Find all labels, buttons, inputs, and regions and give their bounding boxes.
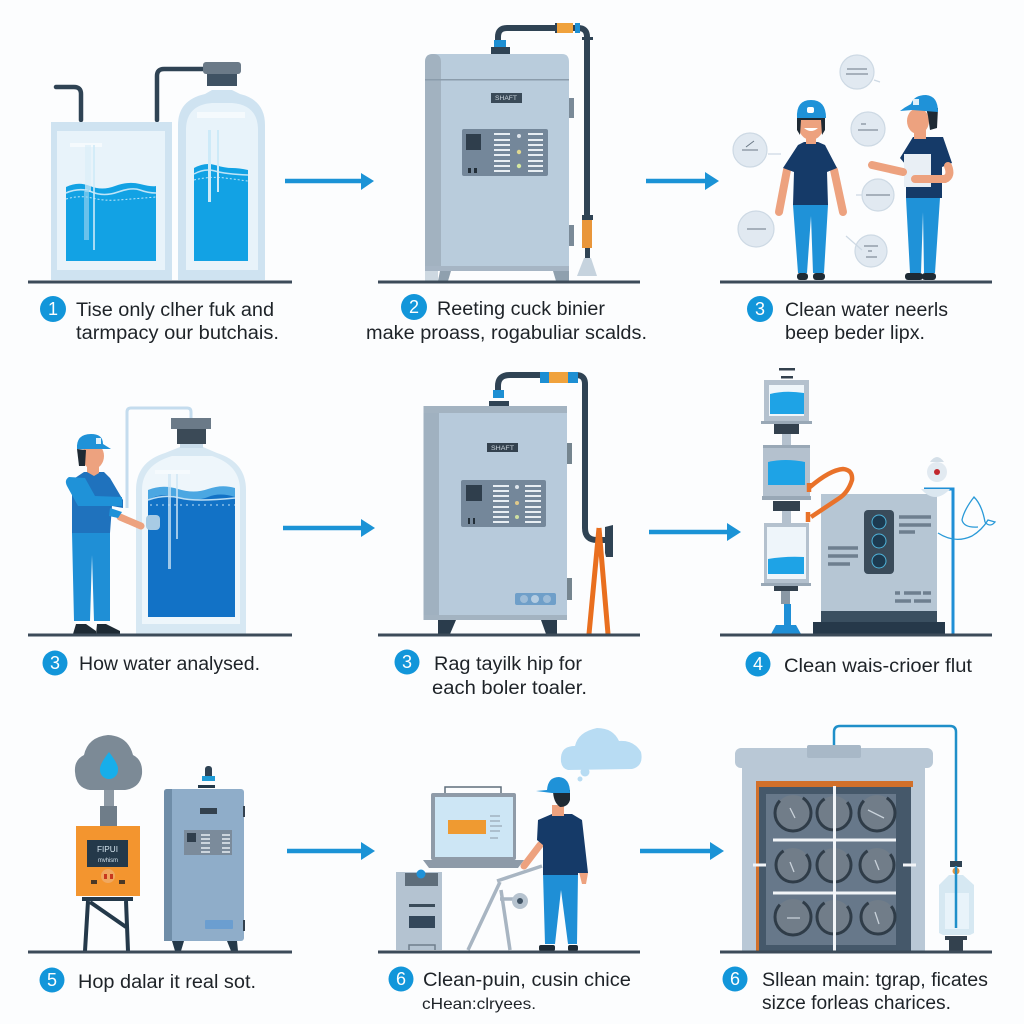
icon: thought cloud bbox=[561, 728, 642, 782]
icon: bottle cap bbox=[203, 62, 241, 86]
icon: left pipe bbox=[56, 87, 81, 120]
icon: blue pipe and gauge bbox=[921, 457, 995, 634]
icon: fan grid bbox=[775, 795, 895, 935]
caption: step 9: sizce forleas charices. bbox=[762, 993, 951, 1014]
caption: step 8: 6 bbox=[396, 969, 406, 989]
icon: square water tank bbox=[51, 122, 172, 280]
icon: white dividers bbox=[753, 786, 916, 951]
icon: orange legs bbox=[589, 528, 608, 634]
caption: step 1 bbox=[40, 296, 279, 344]
icon: boiler cabinet bbox=[425, 54, 574, 281]
icon: stand with wheel bbox=[468, 866, 542, 950]
caption: step 5: 3 bbox=[402, 652, 412, 672]
icon: right pipe bbox=[157, 69, 204, 120]
icon: orange control box: mvhism bbox=[98, 858, 118, 864]
caption: step 2 bbox=[366, 294, 647, 344]
caption: step 6: Clean wais-crioer flut bbox=[784, 656, 973, 677]
caption: step 5: Rag tayilk hip for bbox=[434, 654, 583, 675]
caption: step 6 bbox=[746, 652, 973, 677]
panel: step 5 boiler with orange stand bbox=[378, 372, 741, 699]
arrow bbox=[649, 523, 741, 541]
icon: filter bottle bbox=[939, 861, 974, 951]
panel: step 1 tanks bbox=[28, 62, 374, 344]
icon: feed pipe bbox=[834, 726, 956, 861]
icon: pipe run bbox=[489, 372, 613, 557]
icon: cabinet shell bbox=[735, 745, 933, 951]
arrow bbox=[287, 842, 375, 860]
caption: step 2: 2 bbox=[409, 297, 419, 317]
caption: step 9: Sllean main: tgrap, ficates bbox=[762, 970, 988, 991]
arrow bbox=[640, 842, 724, 860]
icon: printer cabinet bbox=[396, 870, 442, 950]
icon: blue cabinet bbox=[164, 766, 245, 951]
icon: control panel bbox=[461, 480, 546, 527]
caption: step 3: Clean water neerls bbox=[785, 300, 948, 321]
caption: step 9 bbox=[722, 966, 988, 1014]
person: right technician with tablet bbox=[872, 95, 952, 280]
panel: step 9 fan cabinet and bottle bbox=[720, 726, 992, 1014]
caption: step 8: cHean:clryees. bbox=[422, 996, 536, 1013]
caption: step 3: 3 bbox=[755, 299, 765, 319]
icon: boiler cabinet: SHAFT bbox=[491, 446, 514, 452]
caption: step 1: Tise only clher fuk and bbox=[76, 300, 274, 321]
caption: step 1: 1 bbox=[48, 299, 58, 319]
caption: step 3 bbox=[747, 296, 948, 344]
arrow bbox=[285, 173, 374, 190]
panel: step 2 boiler bbox=[366, 23, 719, 344]
arrow bbox=[646, 172, 719, 190]
icon: cap bbox=[171, 418, 211, 448]
caption: step 8 bbox=[388, 966, 631, 1013]
caption: step 5 bbox=[394, 650, 587, 699]
icon: info bubbles bbox=[733, 55, 894, 267]
caption: step 7 bbox=[40, 968, 256, 993]
panel: step 6 filter stack and machine bbox=[720, 368, 995, 677]
icon: large bottle bbox=[136, 447, 246, 642]
icon: boiler pipe bbox=[491, 23, 597, 276]
caption: step 8: Clean-puin, cusin chice bbox=[423, 970, 631, 991]
caption: step 4 bbox=[42, 650, 260, 676]
icon: bottle tank bbox=[178, 90, 265, 280]
icon: orange control box bbox=[76, 826, 140, 951]
icon: stem bbox=[100, 790, 117, 826]
icon: boiler cabinet: SHAFT bbox=[495, 96, 517, 102]
caption: step 5: each boler toaler. bbox=[432, 678, 587, 699]
caption: step 1: tarmpacy our butchais. bbox=[76, 323, 279, 344]
icon: grey cloud with droplet bbox=[75, 735, 142, 790]
person: operator from behind bbox=[524, 777, 588, 951]
caption: step 4: 3 bbox=[50, 653, 60, 673]
panel: step 7 heater and cabinet bbox=[28, 735, 375, 993]
icon: machine bbox=[813, 494, 945, 634]
person: technician at bottle bbox=[66, 434, 160, 634]
icon: orange control box: FIPUI bbox=[97, 845, 118, 854]
person: left technician bbox=[779, 100, 843, 280]
caption: step 9: 6 bbox=[730, 969, 740, 989]
panel: step 8 operator at laptop bbox=[378, 728, 724, 1013]
panel: step 4 water analysis bbox=[28, 408, 375, 676]
icon: boiler cabinet bbox=[424, 406, 572, 634]
icon: control panel bbox=[462, 129, 548, 176]
panel: step 3 technicians bbox=[720, 55, 992, 344]
caption: step 7: 5 bbox=[47, 970, 57, 990]
icon: feed pipe bbox=[127, 408, 191, 508]
caption: step 6: 4 bbox=[753, 654, 763, 674]
caption: step 2: make proass, rogabuliar scalds. bbox=[366, 323, 647, 344]
caption: step 4: How water analysed. bbox=[79, 654, 260, 675]
caption: step 3: beep beder lipx. bbox=[785, 323, 925, 344]
caption: step 2: Reeting cuck binier bbox=[437, 299, 606, 320]
arrow bbox=[283, 519, 375, 537]
caption: step 7: Hop dalar it real sot. bbox=[78, 972, 256, 993]
icon: filter stack bbox=[761, 368, 812, 634]
icon: orange hose bbox=[808, 469, 852, 522]
icon: laptop bbox=[423, 787, 524, 868]
